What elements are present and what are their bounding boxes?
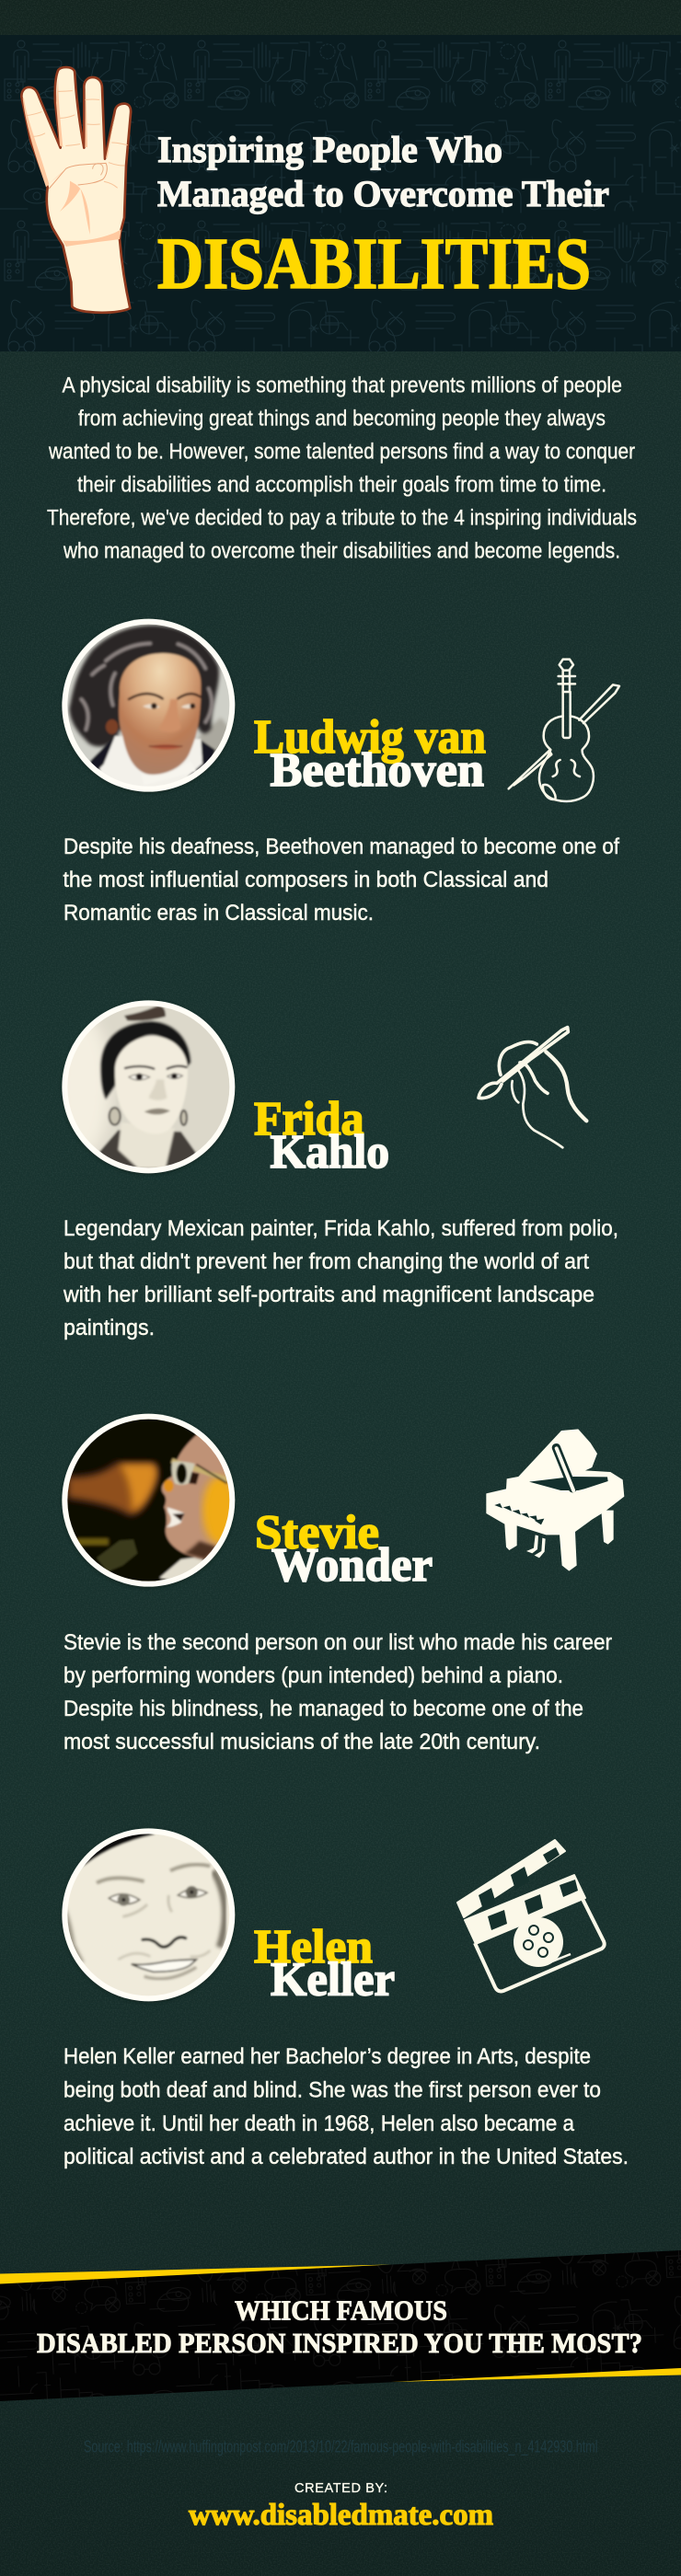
body text: Keller: being both deaf and blind. She was the first person ever to <box>63 2077 601 2103</box>
intro text: from achieving great things and becoming people they always <box>78 407 606 431</box>
title: Managed to Overcome Their <box>157 173 609 214</box>
portrait: Helen Keller <box>62 1828 236 2003</box>
icon: violin and bow <box>509 660 619 801</box>
name: Frida Kahlo <box>254 1093 389 1179</box>
body text: Beethoven: Despite his deafness, Beethoven managed to become one of <box>63 834 619 859</box>
footer credit: www.disabledmate.com <box>189 2499 493 2532</box>
body text: Wonder: most successful musicians of the late 20th century. <box>63 1730 540 1754</box>
body text: Keller <box>63 2044 629 2169</box>
body text: Kahlo: paintings. <box>63 1316 155 1340</box>
portrait: Frida Kahlo <box>62 1000 236 1175</box>
body text: Wonder: by performing wonders (pun intended) behind a piano. <box>63 1663 563 1688</box>
title: DISABILITIES <box>157 224 591 305</box>
body text: Kahlo: but that didn't prevent her from changing the world of art <box>63 1249 589 1274</box>
name: Helen Keller: Keller <box>271 1954 395 2006</box>
body text: Keller: Helen Keller earned her Bachelor’s degree in Arts, despite <box>63 2044 591 2069</box>
hand shading <box>23 76 121 247</box>
name: Frida Kahlo: Frida <box>254 1093 364 1145</box>
body text: Kahlo: with her brilliant self-portraits and magnificent landscape <box>63 1282 594 1307</box>
body text: Wonder <box>63 1630 612 1754</box>
icon: hand holding paintbrush <box>479 1028 586 1147</box>
body text: Beethoven: Romantic eras in Classical music. <box>63 901 374 926</box>
icon: grand piano <box>486 1429 624 1571</box>
name: Frida Kahlo: Kahlo <box>271 1126 389 1179</box>
body text: Wonder: Stevie is the second person on our list who made his career <box>63 1630 612 1655</box>
name: Helen Keller <box>254 1921 395 2006</box>
title: Inspiring People Who <box>157 129 502 170</box>
name: Helen Keller: Helen <box>254 1921 373 1973</box>
banner yellow accents <box>0 2265 681 2382</box>
name: Beethoven: Ludwig van <box>254 711 486 764</box>
footer credit: CREATED BY: <box>294 2481 387 2496</box>
banner question: WHICH FAMOUS <box>235 2294 447 2326</box>
body text: Keller: achieve it. Until her death in 1968, Helen also became a <box>63 2111 575 2136</box>
name: Stevie Wonder: Stevie <box>255 1507 379 1558</box>
icon: hand showing four fingers <box>21 67 131 313</box>
name: Stevie Wonder: Wonder <box>271 1539 433 1592</box>
title <box>157 129 609 305</box>
panel: Wonder <box>46 1403 624 1754</box>
hand creases <box>26 91 127 189</box>
panel: Keller <box>46 1812 629 2169</box>
body text: Kahlo <box>63 1216 618 1340</box>
footer credit <box>189 2481 493 2532</box>
header panel <box>0 35 681 351</box>
body text: Keller: political activist and a celebrated author in the United States. <box>63 2145 629 2169</box>
panel: Kahlo <box>46 994 618 1340</box>
icon: film clapperboard <box>457 1840 605 1991</box>
body text: Wonder: Despite his blindness, he managed to become one of the <box>63 1696 583 1721</box>
body text: Beethoven <box>63 834 619 926</box>
closing banner <box>0 2250 681 2401</box>
portrait: Beethoven <box>62 618 236 793</box>
portrait: Stevie Wonder <box>62 1413 236 1588</box>
name: Stevie Wonder <box>255 1507 433 1592</box>
intro text: their disabilities and accomplish their goals from time to time. <box>77 473 606 497</box>
panel: Beethoven <box>46 607 619 926</box>
banner question: DISABLED PERSON INSPIRED YOU THE MOST? <box>37 2327 642 2359</box>
body text: Kahlo: Legendary Mexican painter, Frida Kahlo, suffered from polio, <box>63 1216 618 1241</box>
intro text <box>47 374 637 563</box>
body text: Beethoven: the most influential composers in both Classical and <box>63 868 548 892</box>
banner question <box>37 2294 642 2359</box>
name: Beethoven: Beethoven <box>271 744 484 797</box>
name: Beethoven <box>254 711 486 797</box>
